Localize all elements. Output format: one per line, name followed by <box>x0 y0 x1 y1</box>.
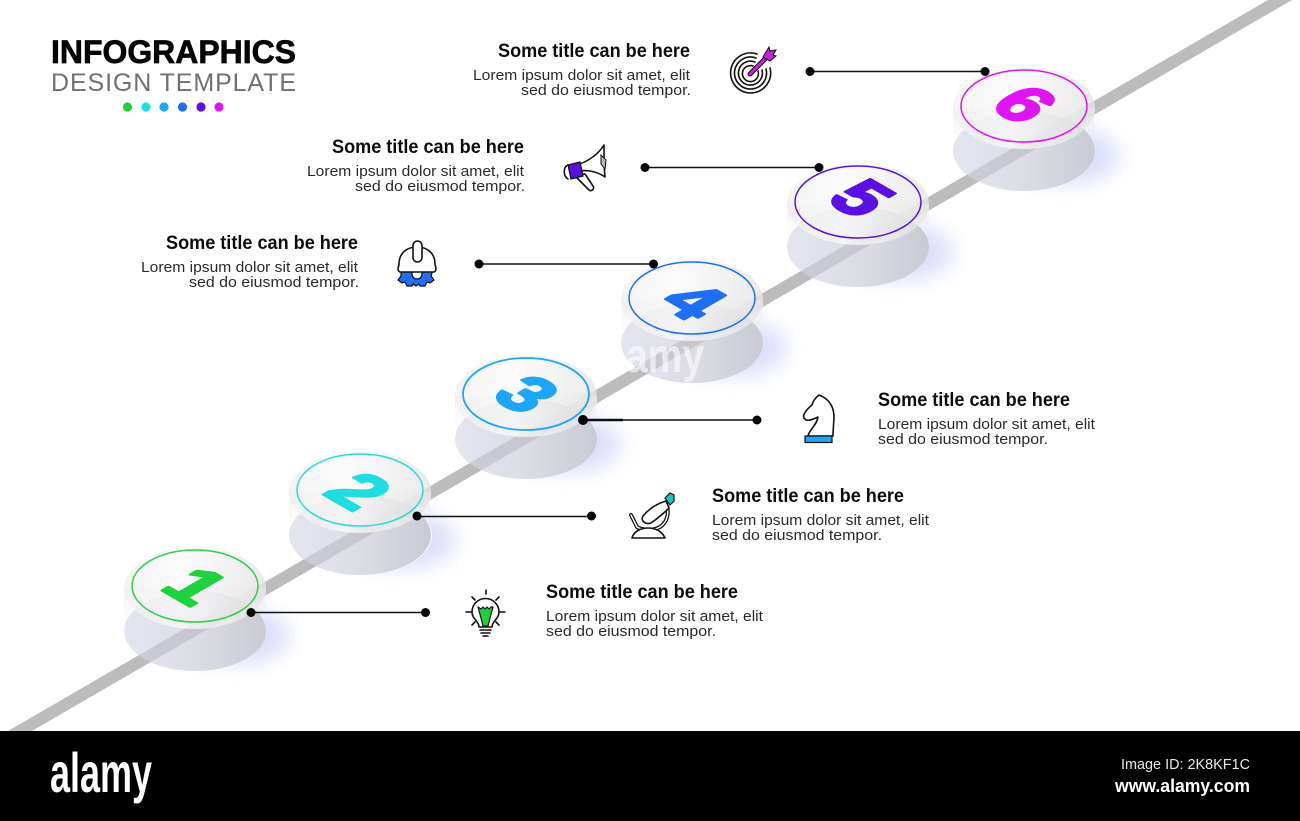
watermark fragment: amy <box>626 330 704 383</box>
text block 6: Some title can be here <box>498 41 690 62</box>
step 2 disc: 2 <box>309 462 409 520</box>
step 6 disc <box>953 67 1095 191</box>
text block 5: Lorem ipsum dolor sit amet, elit <box>307 163 525 180</box>
connector 5 <box>640 163 824 172</box>
text block 5: sed do eiusmod tempor. <box>355 178 525 195</box>
icon: helmet and gear <box>398 241 436 286</box>
step 3 disc: 3 <box>477 365 577 423</box>
step 5 disc: 5 <box>812 169 912 227</box>
title: INFOGRAPHICS <box>51 34 296 70</box>
text block 6: Lorem ipsum dolor sit amet, elit <box>473 67 691 84</box>
icon: target <box>731 47 776 93</box>
text block 4: sed do eiusmod tempor. <box>189 274 359 291</box>
step 6 disc: 6 <box>975 75 1075 133</box>
connector 1 <box>246 608 430 617</box>
footer bar <box>0 731 1300 821</box>
disc shadows <box>124 111 1119 671</box>
step 2 disc <box>289 451 431 575</box>
text block 6: sed do eiusmod tempor. <box>521 82 691 99</box>
text block 1 <box>546 582 764 640</box>
text block 3 <box>878 390 1096 448</box>
text block 3: sed do eiusmod tempor. <box>878 431 1048 448</box>
connector 6 <box>806 67 990 76</box>
step 4 disc: 4 <box>644 272 744 330</box>
footer bar: alamy <box>50 741 152 804</box>
icon: megaphone <box>564 145 606 191</box>
text block 4 <box>141 233 359 291</box>
step 5 disc <box>787 163 929 287</box>
text block 2: Some title can be here <box>712 486 904 507</box>
connector 3 <box>578 415 762 425</box>
title: DESIGN TEMPLATE <box>51 69 296 97</box>
footer bar: Image ID: 2K8KF1C <box>1121 756 1250 773</box>
text block 1: sed do eiusmod tempor. <box>546 623 716 640</box>
step 3 disc <box>455 355 597 479</box>
step 4 disc <box>621 259 763 383</box>
connector 4 <box>474 260 658 268</box>
title <box>51 34 296 97</box>
text block 4: Lorem ipsum dolor sit amet, elit <box>141 259 359 276</box>
icon: microscope <box>631 493 674 538</box>
footer bar: www.alamy.com <box>1114 776 1250 796</box>
step 1 disc <box>124 547 266 671</box>
text block 5: Some title can be here <box>332 137 524 158</box>
text block 3: Lorem ipsum dolor sit amet, elit <box>878 416 1096 433</box>
text block 4: Some title can be here <box>166 233 358 254</box>
text block 2: Lorem ipsum dolor sit amet, elit <box>712 512 930 529</box>
text block 1: Some title can be here <box>546 582 738 603</box>
text block 3: Some title can be here <box>878 390 1070 411</box>
step 1 disc: 1 <box>146 557 246 615</box>
colour dots <box>123 102 224 112</box>
text block 2 <box>712 486 930 544</box>
icon: chess knight <box>804 395 834 442</box>
text block 5 <box>307 137 525 195</box>
text block 1: Lorem ipsum dolor sit amet, elit <box>546 608 764 625</box>
text block 6 <box>473 41 691 99</box>
text block 2: sed do eiusmod tempor. <box>712 527 882 544</box>
icon: light bulb <box>466 590 505 636</box>
connector 2 <box>412 512 596 520</box>
